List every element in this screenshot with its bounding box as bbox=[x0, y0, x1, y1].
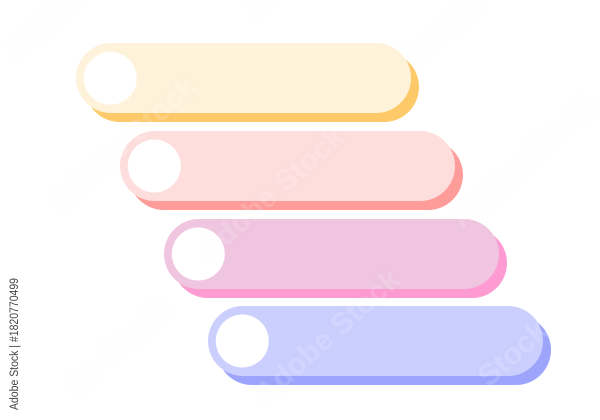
watermark text: Adobe Stock bbox=[445, 88, 600, 235]
panel: yellow pill bbox=[76, 43, 419, 122]
panel: pink pill bbox=[120, 131, 463, 210]
watermark text: be Stock bbox=[61, 293, 176, 401]
credit: vertical stock id: Adobe Stock | #1820770499 bbox=[9, 278, 21, 410]
watermark text: Adobe Stock bbox=[193, 120, 351, 267]
watermark text: Adobe Stock bbox=[249, 263, 407, 410]
panel: blue pill bbox=[208, 306, 551, 385]
panel: mauve pill bbox=[164, 219, 507, 298]
watermark text: Adobe Stock bbox=[45, 70, 203, 217]
watermark text: Stock bbox=[472, 314, 555, 393]
